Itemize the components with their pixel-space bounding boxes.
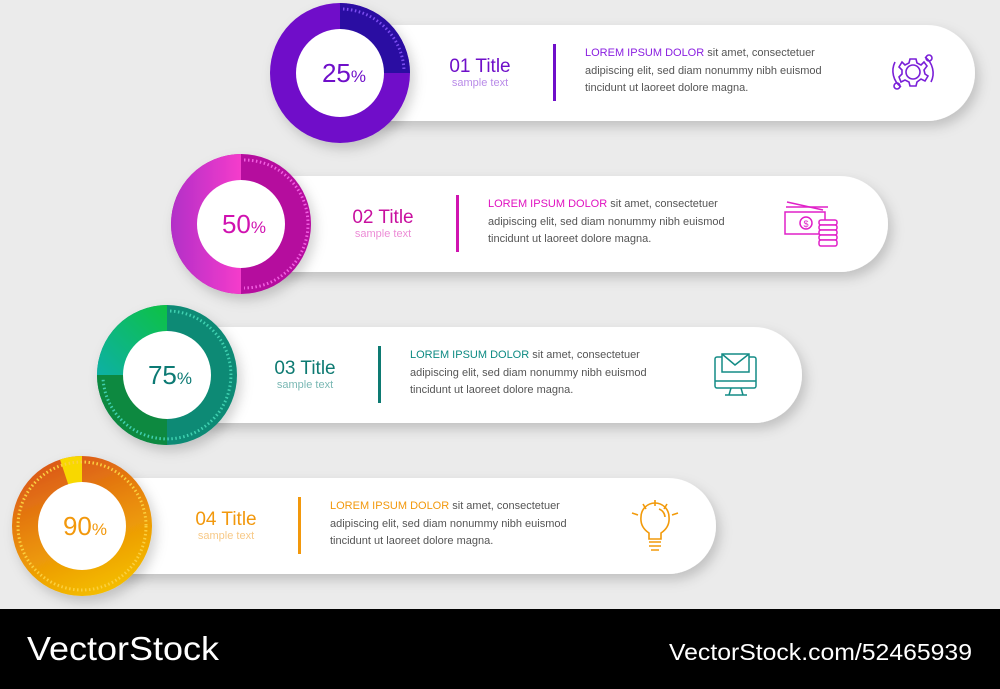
row 4: sample text — [198, 530, 254, 542]
pill 4 — [82, 478, 716, 574]
icon: money: $ — [803, 219, 809, 229]
paragraph 3: LOREM IPSUM DOLOR sit amet, consectetuer — [410, 349, 640, 361]
title 03: 03 Title — [274, 358, 336, 379]
donut 25% — [270, 3, 410, 143]
icon: money — [785, 202, 837, 246]
icon: monitor mail — [715, 354, 756, 395]
title 02: 02 Title — [352, 207, 414, 228]
paragraph 2: adipiscing elit, sed diam nonummy nibh euismod — [488, 216, 725, 228]
footer logo: VectorStock — [27, 630, 220, 667]
paragraph 2: LOREM IPSUM DOLOR sit amet, consectetuer — [488, 198, 718, 210]
row 1 — [270, 3, 975, 143]
row 3 — [97, 305, 802, 445]
paragraph 2: tincidunt ut laoreet dolore magna. — [488, 233, 651, 245]
row 2 — [171, 154, 888, 294]
row 1: sample text — [452, 77, 508, 89]
percent 75: 75% — [148, 360, 192, 390]
footer bar — [0, 609, 1000, 689]
donut 75% — [97, 305, 237, 445]
paragraph 3: tincidunt ut laoreet dolore magna. — [410, 384, 573, 396]
donut 90% — [12, 456, 152, 596]
percent 25: 25% — [322, 58, 366, 88]
percent 50: 50% — [222, 209, 266, 239]
paragraph 4: LOREM IPSUM DOLOR sit amet, consectetuer — [330, 500, 560, 512]
pill 3 — [167, 327, 802, 423]
icon: gear — [893, 55, 933, 89]
icon: bulb — [632, 500, 678, 550]
pill 1 — [340, 25, 975, 121]
footer url: VectorStock.com/52465939 — [669, 639, 972, 665]
percent 90: 90% — [63, 511, 107, 541]
paragraph 3: adipiscing elit, sed diam nonummy nibh euismod — [410, 367, 647, 379]
paragraph 4: tincidunt ut laoreet dolore magna. — [330, 535, 493, 547]
title 01: 01 Title — [449, 56, 511, 77]
row 3: sample text — [277, 379, 333, 391]
pill 2 — [241, 176, 888, 272]
paragraph 1: LOREM IPSUM DOLOR sit amet, consectetuer — [585, 47, 815, 59]
row 4 — [12, 456, 716, 596]
title 04: 04 Title — [195, 509, 257, 530]
row 2: sample text — [355, 228, 411, 240]
paragraph 1: tincidunt ut laoreet dolore magna. — [585, 82, 748, 94]
paragraph 1: adipiscing elit, sed diam nonummy nibh euismod — [585, 65, 822, 77]
donut 50% — [171, 154, 311, 294]
paragraph 4: adipiscing elit, sed diam nonummy nibh euismod — [330, 518, 567, 530]
